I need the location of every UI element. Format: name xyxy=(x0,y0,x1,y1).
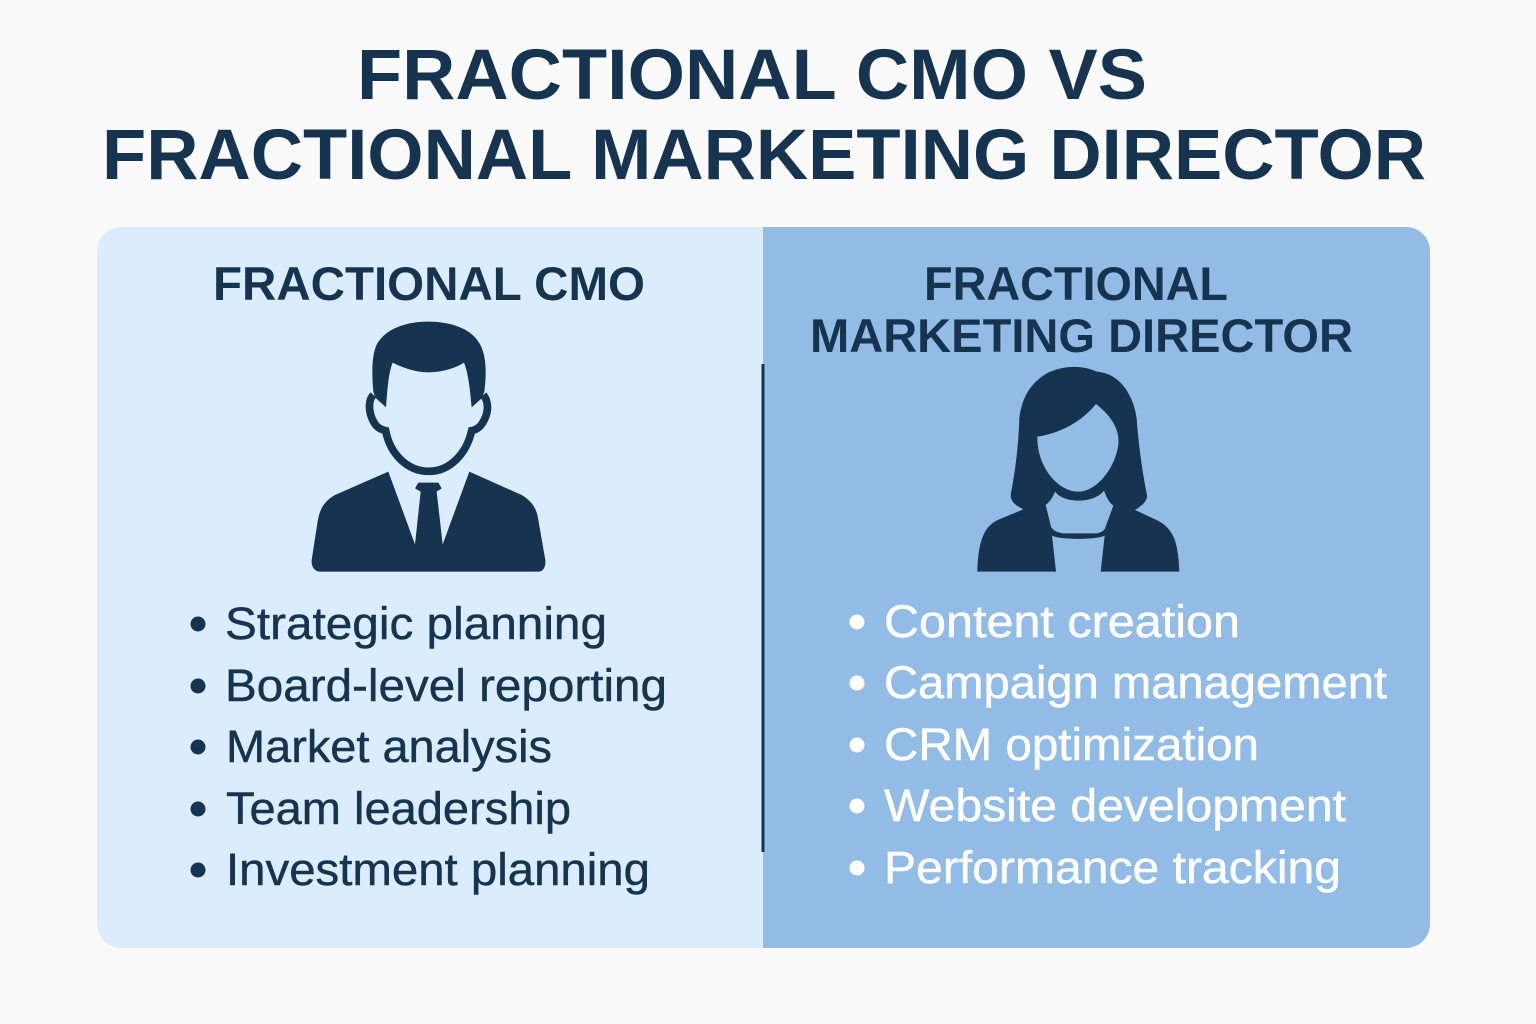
title: FRACTIONAL MARKETING DIRECTOR xyxy=(102,116,1426,195)
panel: fractional marketing director xyxy=(763,227,1430,948)
heading: fractional marketing director: FRACTIONAL xyxy=(924,258,1228,311)
list: CMO responsibilities: Investment planning xyxy=(226,844,650,895)
heading: fractional CMO: FRACTIONAL CMO xyxy=(213,258,645,311)
list: director responsibilities: Content creation xyxy=(884,596,1240,647)
list: CMO responsibilities: Strategic planning xyxy=(225,598,607,649)
heading: fractional marketing director xyxy=(810,258,1353,363)
title xyxy=(102,36,1426,195)
list: director responsibilities: CRM optimization xyxy=(884,719,1259,770)
list: CMO responsibilities: Team leadership xyxy=(226,783,571,834)
panel: fractional CMO xyxy=(97,227,763,948)
list: director responsibilities: Website development xyxy=(884,780,1347,831)
icon: man in suit xyxy=(312,322,545,572)
list: director responsibilities: Campaign management xyxy=(884,657,1388,708)
heading: fractional marketing director: MARKETING DIRECTOR xyxy=(810,310,1353,363)
list: director responsibilities xyxy=(850,596,1388,893)
list: CMO responsibilities: Board-level reporting xyxy=(225,660,667,711)
list: CMO responsibilities: Market analysis xyxy=(226,721,552,772)
list: director responsibilities: Performance tracking xyxy=(884,842,1341,893)
title: FRACTIONAL CMO VS xyxy=(357,36,1147,115)
icon: woman xyxy=(977,367,1179,572)
list: CMO responsibilities xyxy=(190,598,667,895)
